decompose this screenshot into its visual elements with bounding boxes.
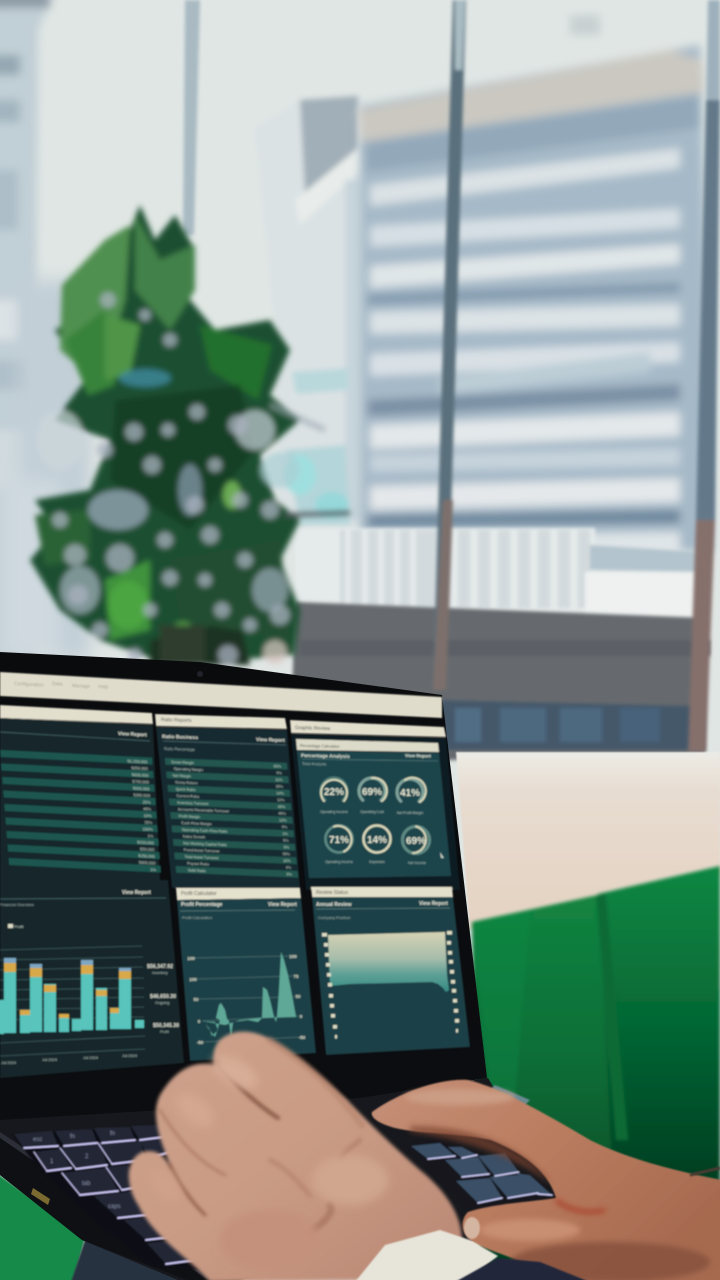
ratio rows: Current Ratio — [176, 794, 199, 799]
bokeh highlights — [52, 292, 290, 665]
table rows: 100% — [142, 826, 153, 832]
app title bar: Data — [52, 681, 63, 688]
keyboard left section: caps — [108, 1204, 121, 1210]
panel: profit percentage chart: 0 — [300, 1014, 303, 1019]
gauge 41%: Net Profit Margin — [397, 811, 423, 815]
key wells — [12, 1125, 200, 1270]
arm hair — [690, 1168, 720, 1175]
table rows: $200,000 — [137, 840, 155, 845]
ratio rows: 12% — [277, 798, 285, 802]
middle building — [255, 96, 366, 530]
haze behind plant — [0, 280, 90, 660]
app title bar: Manage — [72, 683, 90, 690]
hand shading — [405, 1089, 710, 1280]
ratio rows: 8% — [284, 845, 290, 850]
trousers — [70, 1240, 215, 1280]
panel: graphic review with gauges: Total Analysis — [302, 761, 326, 766]
panel: ratio analysis: View Report — [256, 737, 285, 744]
panel: annual review chart: Company Position — [318, 915, 350, 920]
bright leaf spots, blue accent and trunk — [108, 369, 350, 665]
gauge 22% — [316, 773, 352, 814]
gauge 14%: Expenses — [369, 860, 385, 864]
webcam — [197, 671, 203, 677]
plant — [30, 205, 350, 665]
ratio rows: 9% — [282, 825, 288, 829]
panel: ratio analysis: Ratio Percentage — [164, 746, 196, 752]
panel: profit percentage chart: Profit Calculation — [182, 915, 212, 920]
panel: left finance table — [0, 705, 161, 880]
table rows: 10% — [143, 813, 152, 818]
table rows: $50,000 — [140, 846, 155, 852]
bars — [0, 958, 144, 1034]
ratio rows: 12% — [279, 818, 287, 823]
panel: profit percentage chart: 75 — [293, 974, 299, 979]
green seat bottom-left — [0, 1172, 85, 1280]
panel: annual review chart: Annual Review — [316, 902, 352, 908]
ratio rows: 11% — [275, 778, 283, 782]
app title bar: Help — [98, 684, 108, 691]
right building — [358, 15, 712, 556]
table rows: 25% — [142, 799, 151, 805]
laptop lid bezel — [0, 652, 487, 1120]
table rows: $900,000 — [139, 860, 156, 866]
keyboard left section — [12, 1125, 200, 1270]
panel: profit percentage chart: 50 — [295, 994, 301, 999]
window mullions — [183, 0, 720, 752]
gauge 69% — [354, 773, 390, 814]
ratio rows: 15% — [275, 785, 284, 789]
axis ticks — [322, 931, 459, 1038]
gauges — [316, 773, 430, 865]
table rows: $300,000 — [133, 792, 151, 798]
panel: lower left bar chart — [0, 880, 184, 1078]
ratio rows: 46% — [278, 812, 287, 816]
ratio rows: Payout Ratio — [187, 862, 209, 867]
ratio rows: 9% — [276, 771, 283, 775]
hand silhouette — [372, 1080, 720, 1280]
annual area — [328, 932, 449, 992]
panel: ratio analysis — [155, 714, 300, 888]
finger shadows — [160, 1040, 362, 1240]
gauge 71% — [325, 824, 355, 864]
panel: graphic review with gauges: Percentage Calculator — [300, 743, 340, 749]
laptop base — [0, 1078, 560, 1280]
gauge 22%: 22% — [324, 787, 344, 798]
ratio rows: Cash Flow Margin — [181, 821, 212, 826]
panel: left finance table: View Report — [118, 731, 147, 738]
wall behind sofa — [456, 752, 720, 930]
foliage mass — [30, 205, 300, 665]
lower grey podium — [290, 602, 710, 760]
keyboard left section: fn — [70, 1134, 75, 1140]
right hand — [372, 1080, 720, 1280]
ratio rows — [165, 758, 298, 878]
table rows: $1,200,000 — [127, 758, 148, 764]
panel: graphic review with gauges: Percentage Analysis — [301, 753, 350, 760]
panel: profit percentage chart: Profit Percentage — [181, 902, 223, 908]
app title bar: Configuration — [14, 681, 44, 688]
panel: ratio analysis: Ratio Reports — [161, 717, 192, 724]
gauge 14% — [364, 826, 390, 864]
ratio rows: 4% — [286, 866, 292, 870]
ratio rows: Accounts Receivable Turnover — [178, 808, 230, 814]
keyboard left section: tab — [82, 1181, 91, 1187]
ratio rows: Net Margin — [172, 774, 191, 778]
ratio rows: Gross Margin — [171, 760, 194, 765]
table rows: 1% — [150, 867, 157, 872]
app title bar — [0, 672, 442, 718]
panel: graphic review with gauges: View Report — [405, 753, 431, 759]
panel: graphic review with gauges — [290, 720, 460, 890]
gauge 41% — [392, 774, 428, 815]
axis labels — [1, 1053, 138, 1065]
panel: profit percentage chart: 100 — [189, 977, 197, 982]
gauge 69%: 69% — [362, 787, 382, 798]
table rows: 1% — [147, 833, 154, 839]
panel: profit percentage chart — [176, 888, 316, 1061]
ratio rows: 65% — [273, 764, 282, 769]
keyboard left section: fn — [110, 1131, 115, 1137]
table rows: $700,000 — [132, 779, 150, 785]
panel: annual review chart: View Report — [419, 901, 448, 907]
shirt cuff — [355, 1230, 498, 1280]
chart totals: Ongoing — [155, 1001, 169, 1005]
ratio rows: Fixed Asset Turnover — [184, 848, 220, 854]
axis labels: Jul 2024 — [1, 1060, 17, 1065]
watch sliver — [490, 1085, 530, 1105]
panel: graphic review with gauges: Graphic Review — [295, 725, 331, 732]
ratio rows: 1% — [282, 832, 289, 836]
hand silhouette — [129, 1032, 462, 1280]
gauge 14%: 14% — [367, 835, 387, 846]
chart totals: Profit — [160, 1030, 170, 1034]
keyboard left section: esc — [33, 1137, 42, 1143]
gauge 69% second — [402, 826, 430, 865]
light gaps in foliage — [36, 410, 300, 614]
table rows: 40% — [143, 806, 152, 812]
keyboard left section: 1 — [50, 1159, 54, 1165]
table rows: 15% — [144, 820, 153, 825]
ratio rows: 18% — [283, 859, 291, 863]
panel: profit percentage chart: -50 — [299, 1035, 306, 1040]
ratio rows: 8% — [286, 872, 293, 877]
white base block — [295, 528, 705, 618]
ratio rows: Inventory Turnover — [177, 801, 210, 806]
ratio rows: Profit Margin — [178, 814, 200, 819]
panel: profit percentage chart: 100 — [187, 956, 195, 961]
dashboard screen — [0, 672, 470, 1078]
ratio rows: 30% — [282, 852, 291, 856]
gauge 41%: 41% — [400, 788, 420, 799]
table rows: $600,000 — [132, 772, 149, 778]
gauge 71%: 71% — [329, 835, 349, 846]
panel: profit percentage chart: -50 — [197, 1040, 204, 1045]
panel: lower left bar chart: View Report — [122, 890, 151, 896]
ratio rows: Sales Growth — [182, 835, 206, 840]
axis labels: Jul 2024 — [83, 1055, 99, 1060]
table rows: $850,000 — [131, 765, 149, 771]
laptop — [0, 652, 560, 1280]
panel: profit percentage chart: 0 — [198, 1019, 201, 1024]
chart totals: $56,347.92 — [147, 964, 173, 970]
laptop side edge — [0, 1135, 208, 1280]
ratio rows: 14% — [276, 791, 285, 796]
gauge 71%: Operating Income — [325, 860, 353, 864]
chart totals: $50,345.30 — [153, 1023, 179, 1029]
panel: profit percentage chart: 100 — [289, 954, 297, 959]
gauge 22%: Operating Income — [320, 810, 348, 814]
chart totals: $46,650.30 — [150, 994, 176, 1000]
keyboard right section — [405, 1135, 558, 1212]
gauge 69%: Operating Cost — [360, 810, 384, 814]
gauge 69% second: 69% — [406, 836, 426, 847]
table rows: $500,000 — [133, 786, 150, 791]
gauge 69% second: Net Income — [408, 861, 426, 865]
port detail — [31, 1188, 50, 1205]
ratio rows: Total Asset Turnover — [184, 855, 220, 860]
ratio rows: Net Working Capital Ratio — [183, 841, 227, 847]
panel: profit percentage chart: View Report — [268, 902, 297, 908]
ratio rows: Quick Ratio — [176, 787, 196, 792]
axis labels: Jul 2024 — [122, 1053, 138, 1058]
profit area — [202, 952, 296, 1037]
keyboard left section: 2 — [85, 1154, 89, 1160]
ratio rows: 48% — [277, 805, 286, 809]
panel: profit percentage chart: 50 — [193, 997, 199, 1002]
ratio rows: Operating Cash Flow Ratio — [182, 828, 228, 834]
ratio rows: Operating Margin — [174, 767, 203, 772]
panel: annual review chart — [311, 887, 470, 1055]
panel: ratio analysis: Ratio Business — [162, 734, 198, 741]
left tower — [0, 0, 55, 660]
panel: lower left bar chart: Profit — [14, 924, 24, 929]
axis labels: Jul 2024 — [42, 1057, 58, 1062]
chart grid — [193, 956, 301, 1042]
ratio rows: 5% — [283, 839, 289, 843]
ratio rows: Debt Ratio — [188, 868, 206, 873]
table rows — [0, 750, 161, 873]
table rows: $250,000 — [138, 853, 156, 859]
suit sleeve — [455, 1258, 590, 1280]
thumbnail — [464, 1217, 480, 1239]
panel: lower left bar chart: Financial Overview — [0, 902, 34, 907]
chart totals: Inventory — [152, 971, 168, 975]
key glow edges — [24, 1137, 196, 1264]
cursor — [440, 852, 444, 858]
hand highlights — [144, 1049, 388, 1270]
ratio rows: Gross Return — [175, 781, 198, 785]
chart totals — [147, 964, 179, 1034]
panel: profit percentage chart: Profit Calculator — [181, 891, 217, 897]
green sofa — [472, 866, 720, 1280]
grid lines — [0, 946, 145, 1056]
panel: annual review chart: Review Status — [316, 890, 348, 896]
left hand — [129, 1032, 462, 1280]
